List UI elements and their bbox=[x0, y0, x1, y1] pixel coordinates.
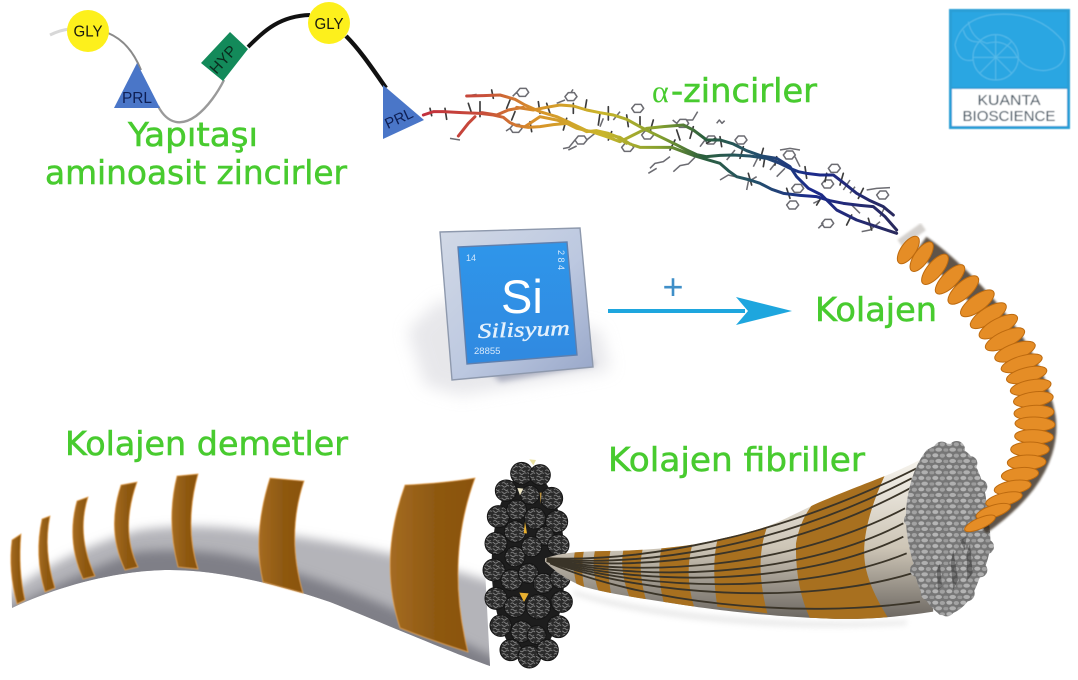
amino acid: GLY 1: GLY bbox=[74, 24, 102, 40]
amino acid: PRL 2: PRL bbox=[382, 105, 416, 133]
heading: building block amino acid chains: aminoasit zincirler bbox=[45, 153, 347, 192]
heading: collagen fibrils: Kolajen fibriller bbox=[608, 440, 865, 479]
element tile: silicon: 2 8 4 bbox=[556, 250, 566, 270]
fibril cross-section bbox=[904, 441, 994, 616]
logo: Kuanta Bioscience: KUANTA bbox=[978, 92, 1040, 109]
element tile: silicon bbox=[408, 228, 610, 395]
yellow gaps bbox=[517, 459, 542, 602]
heading: alpha chains: -zincirler bbox=[671, 71, 817, 110]
amino acid: HYP: HYP bbox=[207, 42, 241, 78]
plus sign: + bbox=[662, 266, 684, 307]
heading: building block amino acid chains bbox=[45, 115, 347, 192]
amino acid: HYP bbox=[201, 32, 248, 81]
bundle cross-section bbox=[483, 459, 572, 668]
illustration: orange collagen coil bbox=[893, 227, 1055, 535]
illustration: alpha chains helix bbox=[423, 88, 897, 233]
illustration: collagen bundle tube bbox=[0, 459, 572, 680]
logo: Kuanta Bioscience bbox=[949, 9, 1070, 129]
arrow: silicon to collagen bbox=[608, 297, 792, 325]
amino acid: PRL 1: PRL bbox=[122, 90, 152, 107]
amino acid: PRL 2 bbox=[382, 85, 424, 139]
heading: alpha chains: α bbox=[652, 73, 669, 109]
element tile: silicon: 14 bbox=[466, 253, 476, 263]
element tile: silicon: Silisyum bbox=[477, 316, 570, 343]
heading: building block amino acid chains: Yapıtaşı bbox=[127, 115, 258, 154]
tube shading bbox=[0, 526, 500, 680]
element tile: silicon: Si bbox=[501, 270, 543, 323]
illustration: amino acid chain bbox=[50, 2, 424, 139]
heading: collagen bundles: Kolajen demetler bbox=[65, 424, 348, 463]
logo: Kuanta Bioscience: BIOSCIENCE bbox=[962, 108, 1056, 125]
fibril bands bbox=[574, 475, 888, 620]
amino acid: GLY 2 bbox=[308, 2, 350, 44]
tube bands bbox=[11, 474, 475, 652]
illustration: collagen fibril cone bbox=[540, 441, 994, 627]
fibril strands bbox=[547, 468, 920, 609]
amino acid: GLY 1 bbox=[67, 10, 109, 52]
amino acid: GLY 2: GLY bbox=[314, 16, 344, 33]
heading: collagen: Kolajen bbox=[815, 290, 937, 329]
element tile: silicon: 28855 bbox=[474, 346, 500, 357]
amino acid: PRL 1 bbox=[114, 63, 160, 108]
